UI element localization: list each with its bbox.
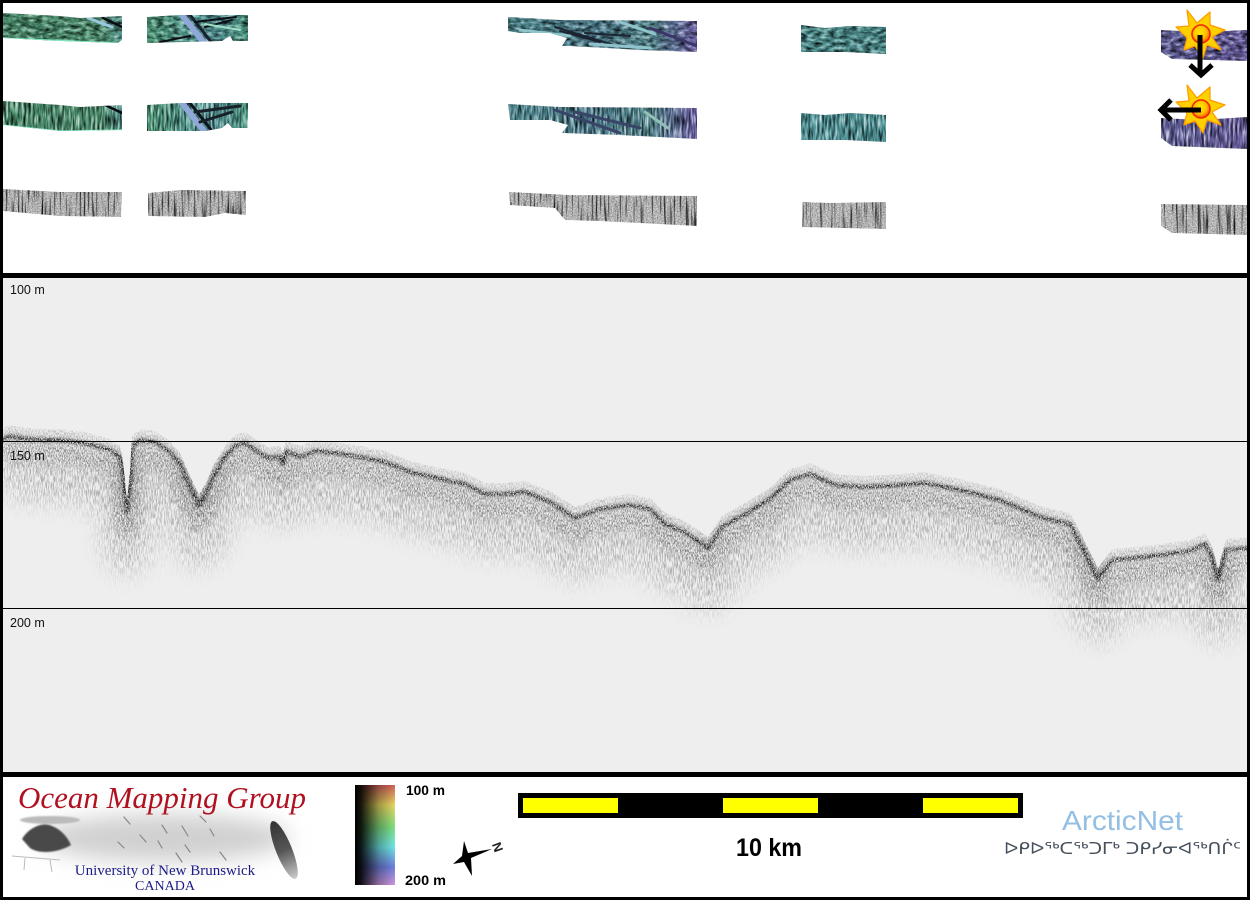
arrow: light direction west xyxy=(1161,100,1201,120)
arrow: light direction south xyxy=(1190,35,1212,75)
icon: sun, east illumination xyxy=(1176,85,1225,133)
depth label 150 m: 150 m xyxy=(10,449,45,463)
logo: Ocean Mapping Group xyxy=(12,780,306,894)
logo: ArcticNet: ArcticNet xyxy=(1062,805,1183,836)
legend: depth colour scale xyxy=(355,782,446,888)
panel: footer xyxy=(12,780,1241,894)
logo wordmark: Ocean Mapping Group xyxy=(18,780,306,815)
seabed echo profile xyxy=(0,432,1250,618)
logo country line: CANADA xyxy=(135,879,196,894)
scale bar label: 10 km xyxy=(736,834,802,862)
strip row 2: shaded bathymetry, sun from east xyxy=(3,101,1247,149)
legend label 200 m: 200 m xyxy=(405,872,446,888)
logo syllabics line: ᐅᑭᐅᖅᑕᖅᑐᒥᒃ ᑐᑭᓯᓂᐊᖅᑎᒌᑦ xyxy=(1004,838,1241,859)
panel: survey swath strips xyxy=(3,10,1247,235)
depth gridline 200 m xyxy=(3,608,1247,609)
depth label 200 m: 200 m xyxy=(10,616,45,630)
depth gridline 150 m xyxy=(3,441,1247,442)
icon: sun, north illumination xyxy=(1176,10,1225,58)
logo university line: University of New Brunswick xyxy=(75,863,256,879)
icon: north arrow: N xyxy=(489,840,506,854)
scale bar xyxy=(518,793,1023,862)
icon: north arrow xyxy=(453,840,506,876)
strip row 1: shaded bathymetry, sun from north xyxy=(3,13,1247,61)
legend label 100 m: 100 m xyxy=(406,782,445,798)
strip row 3: grey backscatter xyxy=(3,189,1247,235)
depth label 100 m: 100 m xyxy=(10,283,45,297)
logo: ArcticNet xyxy=(1004,805,1241,859)
panel: sonar depth profile xyxy=(0,278,1250,772)
